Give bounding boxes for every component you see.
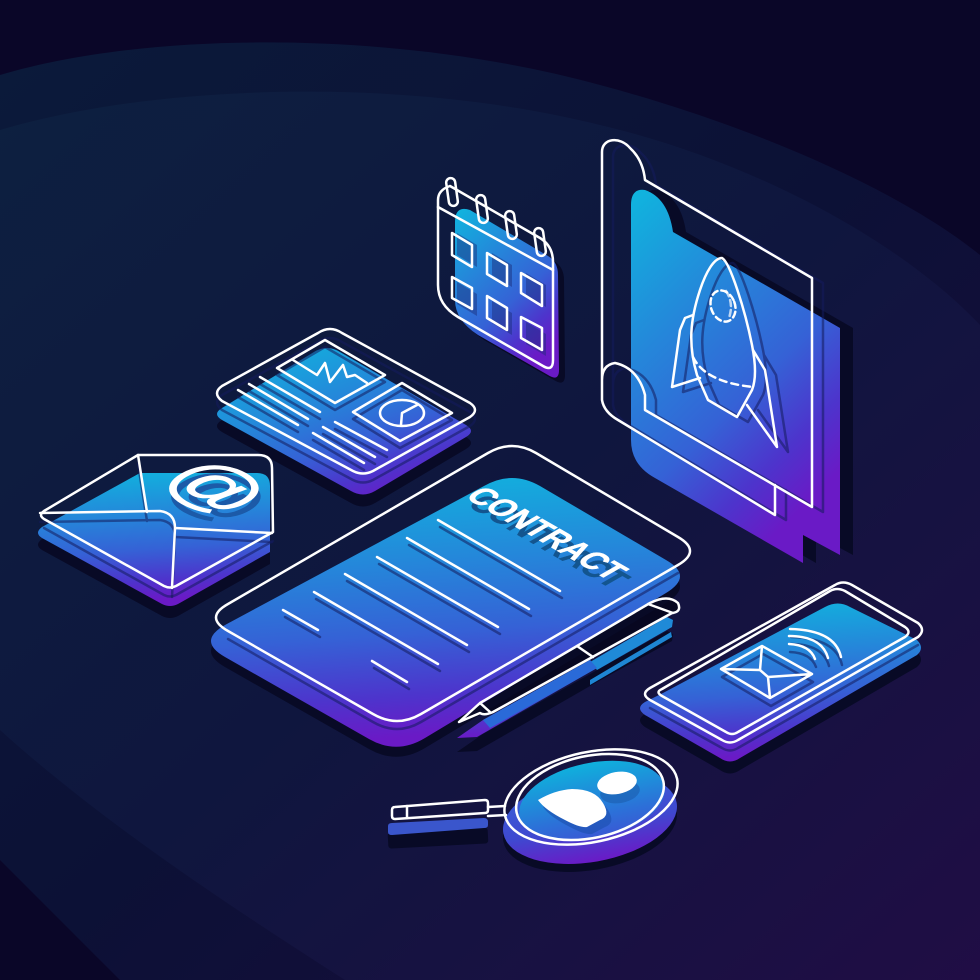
icon: signal arcs xyxy=(789,629,841,659)
icon: rocket blueprint scroll xyxy=(602,140,853,563)
icon: contract document xyxy=(211,446,690,757)
icon: pen xyxy=(457,598,679,752)
pie chart panel xyxy=(353,383,452,441)
contract text lines xyxy=(283,520,562,689)
icon: email envelope: @ xyxy=(145,445,290,528)
icon: document with charts xyxy=(217,329,475,506)
icon: mail xyxy=(721,646,812,698)
icon: email envelope xyxy=(38,445,292,618)
handle xyxy=(392,800,506,819)
icon: user xyxy=(538,769,639,827)
icon: magnifying glass with user xyxy=(388,735,686,885)
line chart panel xyxy=(277,340,385,403)
icon: email envelope: @ xyxy=(147,453,292,536)
heading: CONTRACT: CONTRACT xyxy=(459,490,638,593)
rocket xyxy=(672,258,777,447)
text lines xyxy=(238,377,387,463)
icon: calendar xyxy=(438,178,565,383)
icon: smartphone with message xyxy=(640,582,922,774)
heading: CONTRACT: CONTRACT xyxy=(457,482,636,585)
